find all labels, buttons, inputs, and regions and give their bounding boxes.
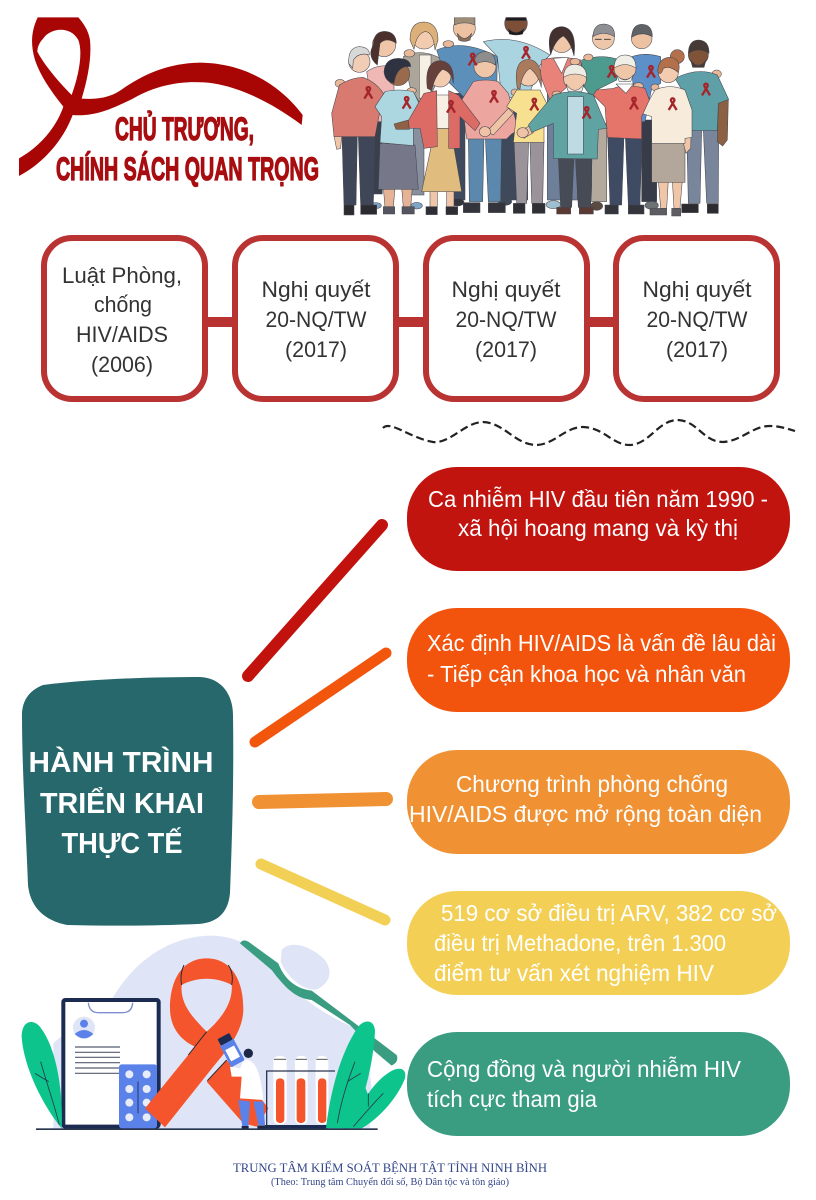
pill: community participation: tích cực tham gia: [427, 1086, 597, 1112]
pill: treatment facilities: [407, 891, 790, 995]
test tubes in rack: [265, 1056, 335, 1129]
footer credit: (Theo: Trung tâm Chuyển đổi số, Bộ Dân tộc và tôn giáo): [271, 1177, 509, 1188]
black man: [499, 100, 528, 200]
illustration: group of people wearing red ribbons: [332, 12, 729, 216]
policy box 3: 20-NQ/TW: [456, 307, 557, 332]
pill: community participation: [407, 1032, 790, 1136]
policy box 1: HIV/AIDS: [76, 322, 168, 347]
policy box 4: 20-NQ/TW: [646, 307, 748, 332]
back row of people: [367, 12, 661, 210]
title: [56, 111, 319, 187]
pill: programme expansion: [407, 750, 790, 854]
old man in teal jacket: [517, 64, 607, 214]
connector lines: [248, 525, 386, 920]
policy box 4: (2017): [666, 337, 728, 362]
woman in red cardigan and tan skirt: [394, 61, 480, 215]
blue polo man: [642, 120, 657, 202]
policy box 1: chống: [94, 292, 152, 317]
joined hands: [479, 127, 528, 138]
background blob: [53, 936, 372, 1128]
woman with hair bun in cream shirt: [642, 50, 692, 216]
red ribbon pins: [364, 47, 710, 119]
footer credit: TRUNG TÂM KIỂM SOÁT BỆNH TẬT TỈNH NINH BÌNH: [233, 1160, 547, 1175]
policy box 4: [616, 238, 777, 399]
woman in light blue shirt: [375, 58, 421, 214]
pill: programme expansion: Chương trình phòng chống: [456, 771, 728, 797]
panel: journey heading: TRIỂN KHAI: [40, 786, 204, 820]
bearded man: [454, 93, 466, 200]
panel: journey heading: [22, 677, 233, 926]
right leaves: [326, 1021, 405, 1128]
pill: first HIV case: [407, 467, 790, 571]
left leaf: [22, 1022, 62, 1128]
connector bars between policy boxes: [205, 317, 617, 327]
policy box 3: Nghị quyết: [452, 277, 561, 302]
pill: programme expansion: HIV/AIDS được mở rộng toàn diện: [409, 801, 762, 827]
clipboard: [63, 1000, 159, 1127]
icon: red awareness ribbon: [19, 17, 303, 176]
woman in yellow shirt: [487, 59, 548, 213]
policy box 2: Nghị quyết: [262, 277, 371, 302]
left man in red shirt: [332, 47, 383, 215]
panel: journey heading: THỰC TẾ: [62, 826, 182, 860]
ground line: [36, 1128, 378, 1130]
doctor holding bottle: [217, 1032, 265, 1129]
illustration: HIV care scene: [22, 936, 405, 1130]
policy box 4: Nghị quyết: [642, 277, 752, 302]
magnifier handle: [240, 940, 397, 1066]
pill: long-term issue: [407, 608, 790, 712]
policy box 1: Luật Phòng,: [62, 263, 182, 288]
pill: first HIV case: Ca nhiễm HIV đầu tiên năm 1990 -: [428, 486, 768, 512]
pill: community participation: Cộng đồng và người nhiễm HIV: [427, 1056, 742, 1082]
big orange ribbon: [145, 958, 268, 1127]
man with white beard in red sweater: [593, 55, 649, 214]
man in pink jacket: [462, 52, 518, 213]
policy box 2: [235, 238, 396, 399]
right man in teal polo: [675, 40, 729, 213]
pill: treatment facilities: điều trị Methadone, trên 1.300: [434, 930, 726, 956]
footer credit: [233, 1160, 547, 1188]
pill: long-term issue: - Tiếp cận khoa học và nhân văn: [427, 661, 746, 687]
pill: long-term issue: Xác định HIV/AIDS là vấn đề lâu dài: [427, 630, 776, 656]
title: CHÍNH SÁCH QUAN TRỌNG: [56, 151, 319, 187]
hands on shoulders: [335, 41, 721, 98]
policy box 2: (2017): [285, 337, 347, 362]
pill: treatment facilities: điểm tư vấn xét nghiệm HIV: [434, 960, 715, 986]
pill: treatment facilities: 519 cơ sở điều trị ARV, 382 cơ sở: [441, 900, 777, 926]
panel: journey heading: HÀNH TRÌNH: [28, 745, 213, 779]
policy box 1: [44, 238, 205, 399]
blond woman: [411, 97, 424, 195]
title: CHỦ TRƯƠNG,: [115, 111, 254, 147]
pink woman: [374, 122, 383, 194]
policy box 3: [426, 238, 587, 399]
glasses man: [592, 123, 607, 202]
policy box 1: (2006): [91, 352, 153, 377]
pill blister pack: [119, 1064, 157, 1128]
coral woman: [547, 93, 577, 200]
policy box 2: 20-NQ/TW: [266, 307, 367, 332]
pill: first HIV case: xã hội hoang mang và kỳ thị: [458, 515, 738, 541]
policy box 3: (2017): [475, 337, 537, 362]
